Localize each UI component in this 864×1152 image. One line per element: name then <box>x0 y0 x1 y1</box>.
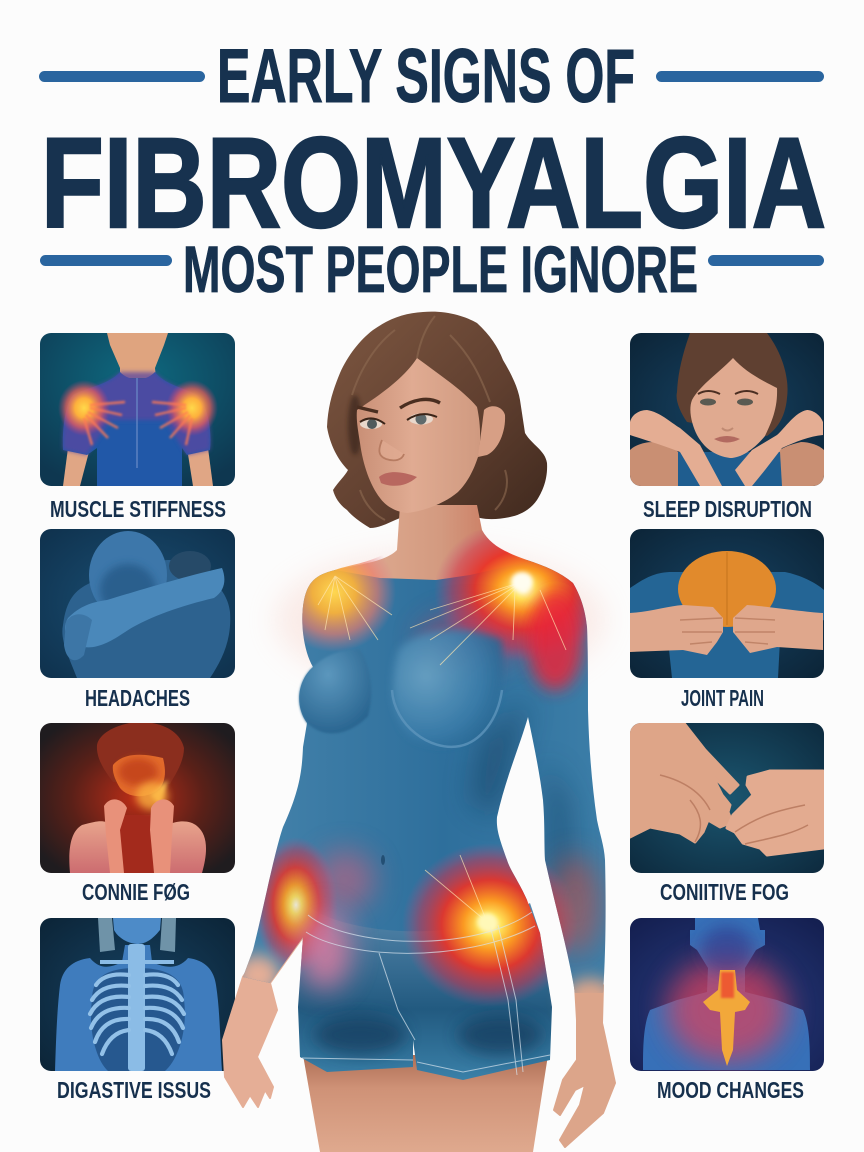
nose <box>379 440 404 460</box>
panel: headaches <box>40 529 235 678</box>
thigh gap shadow <box>414 1068 416 1152</box>
central figure <box>223 312 616 1152</box>
navel <box>381 855 385 865</box>
title <box>39 34 826 306</box>
shorts <box>298 903 552 1080</box>
panel: mood changes <box>630 918 824 1071</box>
panel: sleep disruption <box>630 333 824 486</box>
label: joint pain: JOINT PAIN <box>681 685 764 711</box>
panel: connie fog <box>40 722 235 873</box>
hair shadow <box>348 395 362 455</box>
label: mood changes: MOOD CHANGES <box>657 1077 804 1103</box>
left hand <box>223 930 303 1107</box>
breasts <box>299 630 503 747</box>
hair strands <box>352 316 507 520</box>
ear <box>478 406 505 457</box>
panel: joint pain <box>630 529 824 678</box>
title: EARLY SIGNS OF <box>217 34 635 119</box>
panel: muscle stiffness <box>40 333 235 486</box>
waistband <box>302 912 550 1075</box>
eyes <box>360 414 437 429</box>
neck <box>335 505 527 580</box>
label: sleep disruption: SLEEP DISRUPTION <box>643 496 812 522</box>
panel: coniitive fog <box>630 722 824 873</box>
body shading and heat <box>236 518 616 1055</box>
soft halo <box>275 550 605 690</box>
brows <box>357 399 440 412</box>
label: headaches: HEADACHES <box>85 685 190 711</box>
face <box>357 358 480 513</box>
pain rays <box>318 576 566 922</box>
label: coniitive fog: CONIITIVE FOG <box>660 879 789 905</box>
lips <box>379 472 417 486</box>
label: digastive issus: DIGASTIVE ISSUS <box>57 1077 211 1103</box>
label: connie fog: CONNIE FØG <box>82 879 190 905</box>
right hand <box>554 985 615 1147</box>
suit <box>243 550 606 993</box>
pain highlights <box>511 572 533 592</box>
panel: digastive issus <box>40 918 235 1071</box>
legs <box>303 1055 548 1152</box>
label: muscle stiffness: MUSCLE STIFFNESS <box>50 496 226 522</box>
hair back <box>327 312 547 528</box>
